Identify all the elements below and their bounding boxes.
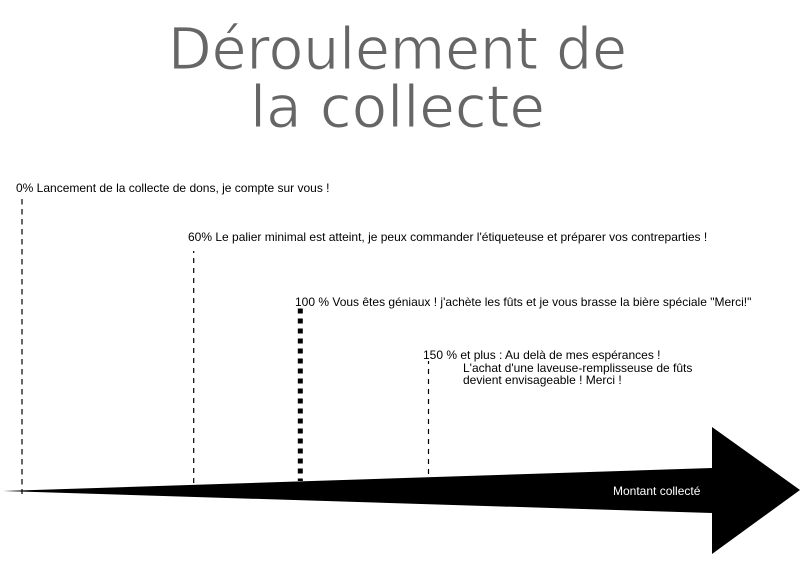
arrow: montant collecté <box>3 427 800 554</box>
label: 150%: devient envisageable ! Merci ! <box>463 373 622 387</box>
marker line: 60% <box>193 251 195 484</box>
title: la collecte <box>250 73 545 141</box>
marker line: 0% <box>21 199 23 494</box>
label: 0%: 0% Lancement de la collecte de dons, je compte sur vous ! <box>16 181 330 195</box>
label: 60%: 60% Le palier minimal est atteint, je peux commander l'étiqueteuse et préparer vos contreparties ! <box>188 230 707 244</box>
label: 150% <box>423 348 692 387</box>
label: 100%: 100 % Vous êtes géniaux ! j'achète les fûts et je vous brasse la bière spéciale "Merci!" <box>295 295 751 309</box>
arrow: montant collecté: Montant collecté <box>613 484 701 498</box>
label: 150%: 150 % et plus : Au delà de mes espérances ! <box>423 348 660 362</box>
label: 150%: L'achat d'une laveuse-remplisseuse de fûts <box>463 360 692 374</box>
title: Déroulement de <box>168 15 627 83</box>
marker line: 150% <box>428 361 430 475</box>
title <box>168 15 627 141</box>
marker line: 100% <box>298 308 303 481</box>
